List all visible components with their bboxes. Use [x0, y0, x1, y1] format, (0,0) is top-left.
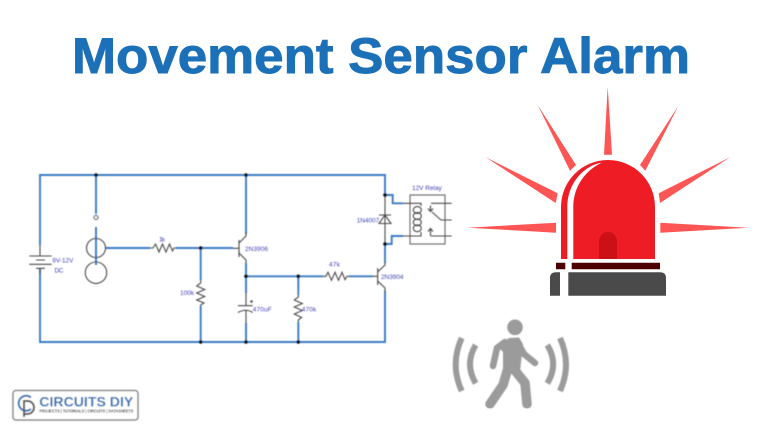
capacitor 470uF [238, 293, 253, 323]
title: Movement Sensor Alarm [72, 28, 690, 84]
resistor 1k [150, 244, 176, 252]
component labels: 470uF [253, 307, 272, 314]
component labels: 9V-12V [52, 258, 74, 265]
inner lamp [599, 232, 617, 259]
dome highlight [567, 162, 602, 259]
motion waves [456, 338, 566, 391]
logo: Circuits DIY [13, 390, 138, 420]
logo tagline: PROJECTS | TUTORIALS | CIRCUITS | DATASHEETS [39, 409, 133, 414]
component labels: 470k [302, 307, 317, 314]
blue wires [40, 175, 403, 342]
light rays [467, 87, 748, 233]
logo wordmark: CIRCUITS DIY [39, 395, 133, 410]
component labels: 12V Relay [412, 185, 442, 192]
battery symbol [29, 245, 52, 274]
dark collar [556, 263, 660, 269]
relay 12V [403, 195, 452, 244]
head [507, 320, 523, 335]
dome [561, 160, 655, 259]
logo mark [19, 396, 34, 417]
component labels: 100k [180, 290, 195, 297]
circuit schematic [29, 173, 452, 344]
motion sensor symbol [85, 216, 107, 283]
diode 1N4007 [379, 195, 391, 244]
icon: red alarm beacon [467, 87, 748, 296]
transistor 2N3904 [373, 262, 385, 292]
component labels: DC [54, 268, 64, 275]
resistor 100k [197, 280, 205, 306]
logo frame [13, 390, 138, 420]
component labels: 1k [159, 237, 166, 244]
torso [498, 338, 523, 374]
resistor 47k [323, 272, 349, 280]
component labels: 2N3906 [245, 246, 268, 253]
legs [490, 368, 527, 404]
arms [493, 342, 535, 366]
component labels [52, 185, 442, 314]
resistor 470k [294, 295, 302, 322]
junction nodes [94, 173, 387, 344]
component labels: 1N4007 [357, 217, 380, 224]
component leads and symbols [29, 195, 452, 323]
icon: walking person with motion waves [456, 320, 566, 404]
transistor 2N3906 [233, 232, 246, 263]
component labels: 2N3904 [381, 274, 404, 281]
component labels: 47k [329, 262, 341, 269]
base [550, 272, 666, 296]
